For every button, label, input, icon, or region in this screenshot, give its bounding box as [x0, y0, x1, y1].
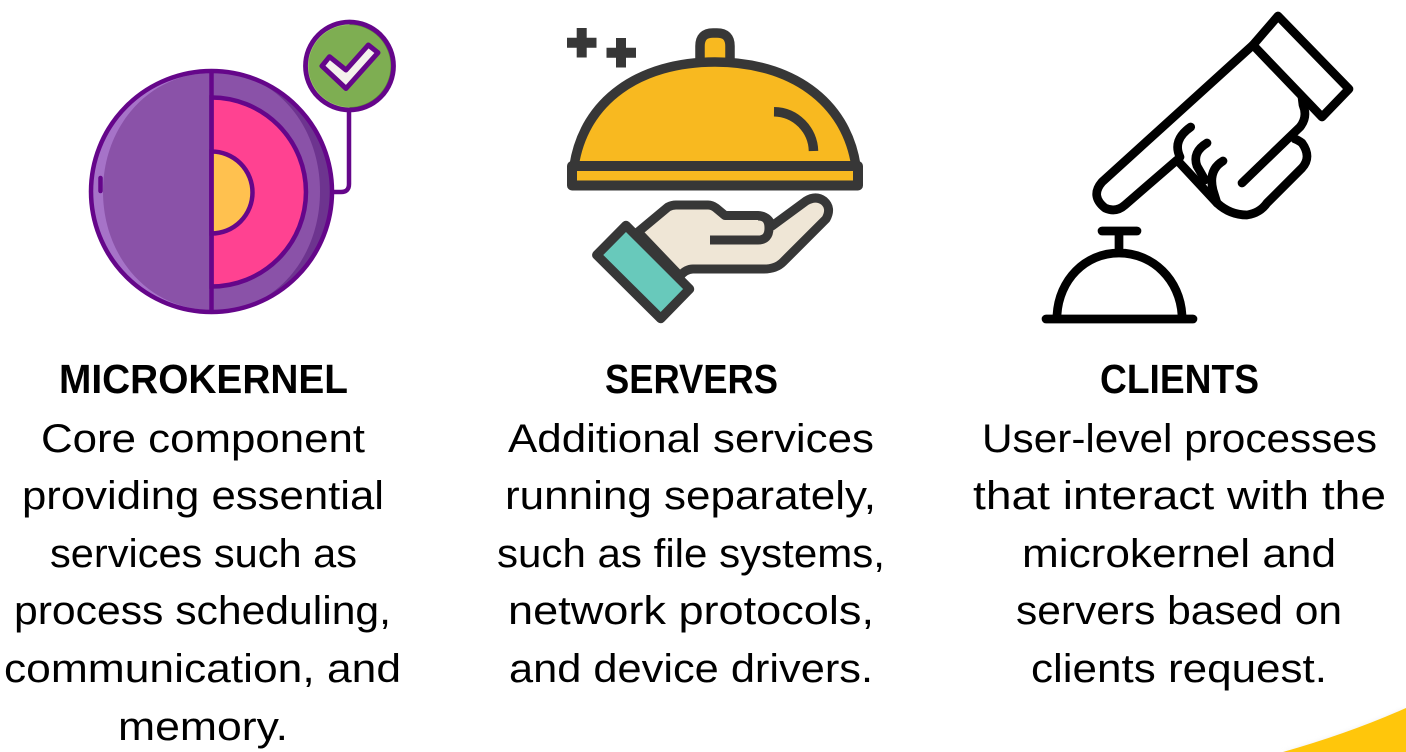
pointing hand	[1097, 45, 1307, 215]
description: that interact with the	[973, 474, 1386, 518]
cuff	[597, 225, 690, 319]
column: clients	[973, 356, 1386, 691]
description	[4, 417, 401, 749]
column: microkernel	[4, 356, 401, 749]
sparkle plus signs	[567, 28, 636, 68]
description: microkernel and	[1022, 532, 1336, 576]
cuff	[1253, 16, 1349, 117]
description: and device drivers.	[509, 647, 873, 691]
highlight arc	[774, 112, 814, 151]
description: process scheduling,	[14, 589, 391, 633]
icon: layered core sphere with check badge	[91, 22, 394, 313]
description: running separately,	[505, 474, 876, 518]
cloche knob	[700, 33, 730, 63]
description: such as file systems,	[497, 532, 885, 576]
column: servers	[497, 356, 885, 691]
check badge	[306, 22, 394, 110]
tray rim	[572, 166, 858, 186]
description: Additional services	[508, 417, 874, 461]
description	[973, 417, 1386, 691]
finger curls	[1178, 127, 1223, 203]
description: memory.	[118, 705, 288, 749]
description: providing essential	[22, 474, 384, 518]
corner swoosh	[1283, 708, 1406, 752]
description: clients request.	[1031, 647, 1327, 691]
description: network protocols,	[508, 589, 874, 633]
description: services such as	[50, 532, 357, 576]
back of hand	[1242, 97, 1305, 183]
heading: CLIENTS	[1100, 356, 1259, 402]
description: servers based on	[1016, 589, 1342, 633]
cloche dome	[574, 62, 856, 166]
icon: serving cloche on hand	[567, 28, 858, 319]
description: communication, and	[4, 647, 401, 691]
bell	[1046, 231, 1193, 319]
sphere	[91, 70, 332, 313]
badge stem	[332, 108, 349, 192]
description: Core component	[41, 417, 365, 461]
hand	[638, 198, 829, 276]
heading: MICROKERNEL	[59, 356, 348, 402]
description	[497, 417, 885, 691]
thumb line	[710, 216, 769, 240]
heading: SERVERS	[605, 356, 778, 402]
description: User-level processes	[982, 417, 1377, 461]
icon: finger pressing service bell	[1046, 16, 1349, 319]
